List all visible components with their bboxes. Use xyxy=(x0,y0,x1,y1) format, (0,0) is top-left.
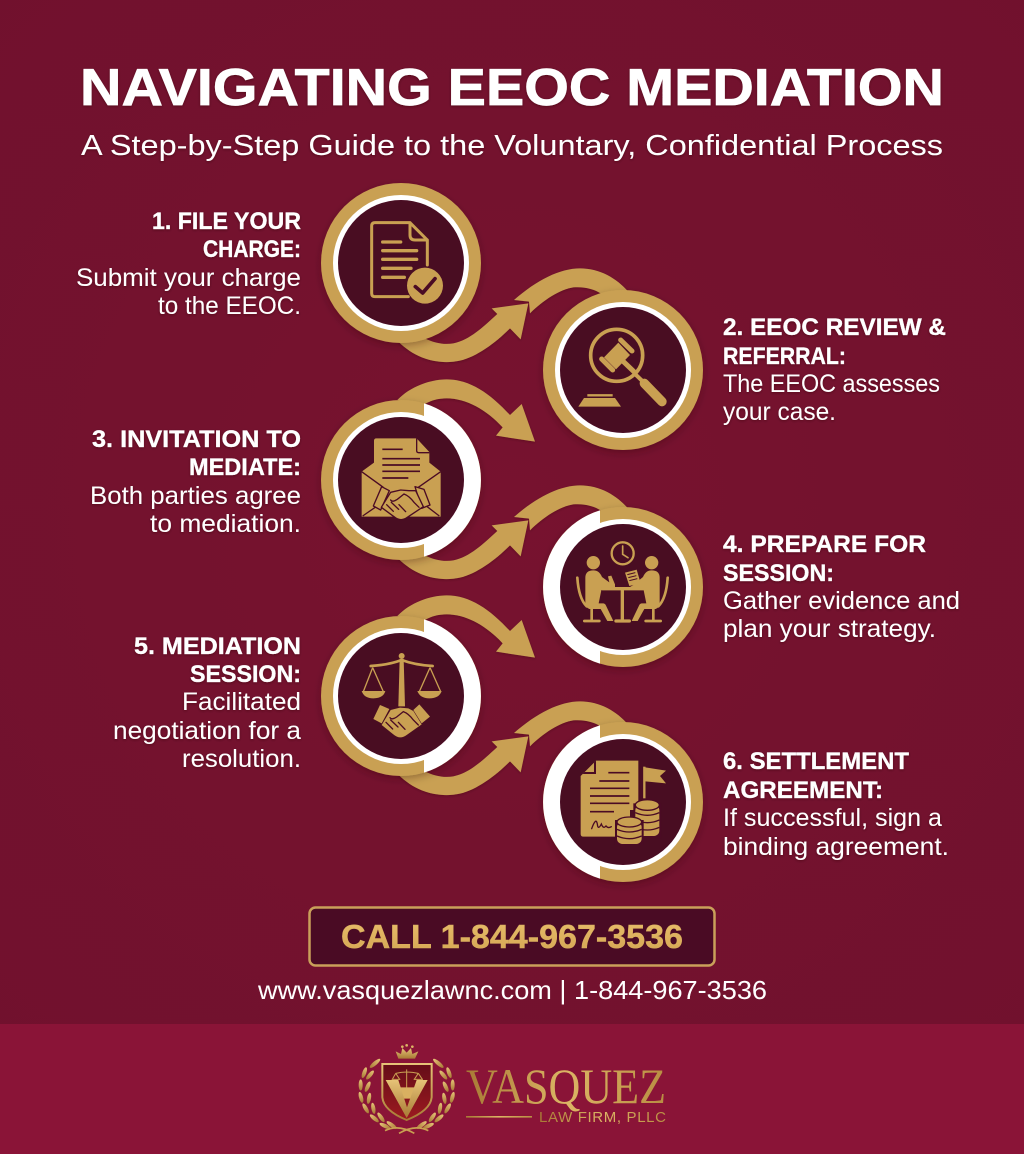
step 1 text: 1. FILE YOUR xyxy=(152,208,301,235)
logo rule xyxy=(466,1116,532,1118)
step 1 circle badge xyxy=(321,183,481,343)
step 3 text: 3. INVITATION TO xyxy=(92,426,301,453)
logo tagline: LAW FIRM, PLLC xyxy=(539,1109,666,1126)
icon: envelope with handshake xyxy=(362,438,441,520)
step 3 circle badge xyxy=(321,400,481,560)
arrow: step 1 to step 2 xyxy=(398,268,628,362)
step 4 text: SESSION: xyxy=(723,560,834,587)
icon: scales of justice over handshake xyxy=(362,653,442,737)
title: NAVIGATING EEOC MEDIATION xyxy=(80,59,944,117)
subtitle: A Step-by-Step Guide to the Voluntary, Confidential Process xyxy=(81,130,943,162)
step 4 text: plan your strategy. xyxy=(723,615,936,643)
icon: gavel in magnifying glass xyxy=(578,329,662,407)
step 4 text xyxy=(723,531,960,643)
step 5 text xyxy=(113,633,301,773)
step 2 text: 2. EEOC REVIEW & xyxy=(723,314,946,341)
step 5 text: negotiation for a xyxy=(113,717,301,745)
footer band xyxy=(0,1024,1024,1154)
arrow: step 3 to step 4 xyxy=(398,485,628,579)
step 3 text: to mediation. xyxy=(150,510,301,538)
step 6 circle badge xyxy=(543,722,703,882)
logo emblem xyxy=(358,1044,456,1133)
step 5 text: resolution. xyxy=(182,745,301,773)
step 6 text: binding agreement. xyxy=(723,833,949,861)
step 2 text xyxy=(723,314,946,426)
step 5 text: 5. MEDIATION xyxy=(134,633,301,660)
icon: document with check mark xyxy=(372,223,443,304)
logo: Vasquez Law Firm xyxy=(358,1044,666,1133)
step 1 text: Submit your charge xyxy=(76,264,301,292)
step 4 text: Gather evidence and xyxy=(723,587,960,615)
call to action button: CALL 1-844-967-3536 xyxy=(341,918,683,955)
step 5 circle badge xyxy=(321,616,481,776)
step 3 text: MEDIATE: xyxy=(189,454,301,481)
call to action button xyxy=(310,908,714,966)
step 6 text: AGREEMENT: xyxy=(723,777,883,804)
step 1 text: to the EEOC. xyxy=(158,292,301,320)
step 6 text xyxy=(723,748,949,861)
step 2 text: REFERRAL: xyxy=(723,343,846,370)
step 4 text: 4. PREPARE FOR xyxy=(723,531,926,558)
step 1 text: CHARGE: xyxy=(203,236,301,263)
step 2 text: your case. xyxy=(723,398,836,426)
step 5 text: Facilitated xyxy=(182,688,301,716)
step 4 circle badge xyxy=(543,507,703,667)
step 5 text: SESSION: xyxy=(190,661,301,688)
arrow: step 4 to step 5 xyxy=(397,595,535,658)
arrow: step 5 to step 6 xyxy=(398,701,628,795)
icon: two people meeting at a table xyxy=(577,542,668,621)
step 3 text: Both parties agree xyxy=(90,482,301,510)
step 6 text: If successful, sign a xyxy=(723,804,942,832)
step 6 text: 6. SETTLEMENT xyxy=(723,748,909,775)
icon: signed agreement with flag and coins xyxy=(581,761,666,845)
step 2 circle badge xyxy=(543,290,703,450)
arrow: step 2 to step 3 xyxy=(397,379,535,442)
logo wordmark: VASQUEZ xyxy=(466,1058,666,1114)
step 2 text: The EEOC assesses xyxy=(723,370,940,398)
step 1 text xyxy=(76,208,301,320)
contact line: www.vasquezlawnc.com | 1-844-967-3536 xyxy=(257,975,767,1005)
step 3 text xyxy=(90,426,301,538)
